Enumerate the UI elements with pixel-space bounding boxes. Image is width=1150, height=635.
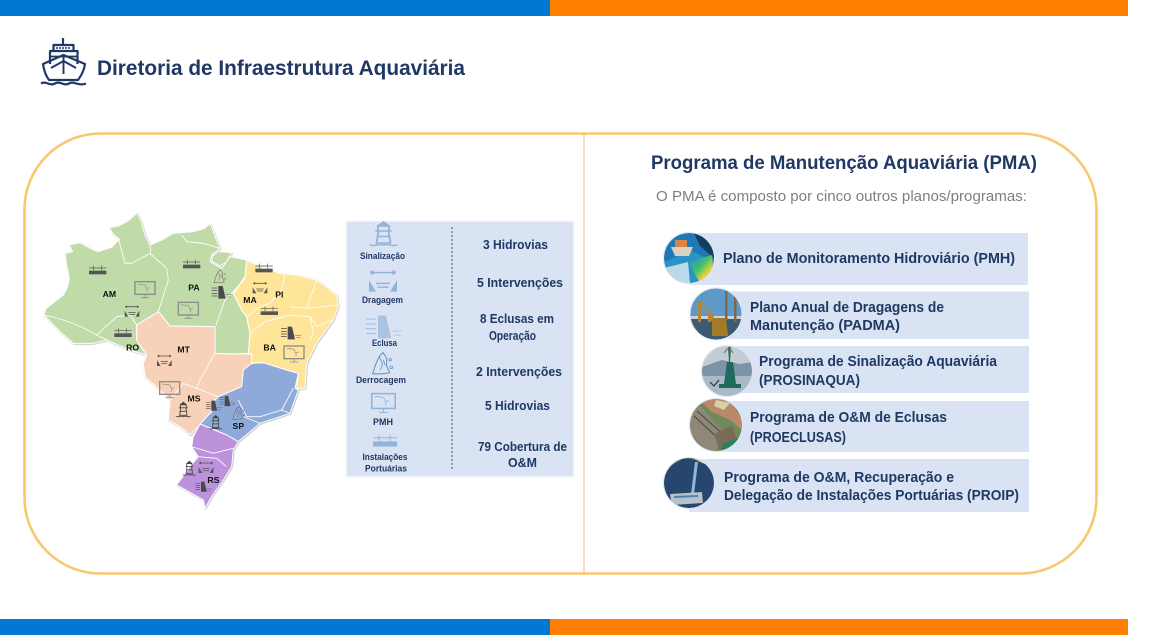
map icons [89,260,304,492]
label: Sinalização: Sinalização [360,251,405,261]
panel divider [583,134,585,573]
Marajó island [212,252,232,266]
program: PROSINAQUA [702,346,1029,396]
state labels: MS [188,394,201,404]
icons: monitors [135,282,304,398]
top colour bar [0,0,1128,16]
value: 2 Intervenções: 2 Intervenções [476,365,562,379]
label: Eclusa: Eclusa [372,338,398,348]
state labels: MA [243,295,257,305]
label: Derrocagem: Derrocagem [356,375,406,385]
value: 79 Cobertura de O&M: 79 Cobertura de [478,440,567,454]
program: PMH [664,232,1028,285]
value: 8 Eclusas em Operação: Operação [489,329,536,343]
photo: dredger [690,288,742,340]
panel: legend table [346,221,574,476]
icons: rock removal [214,270,245,419]
state labels: BA [263,343,277,353]
region: Norte [44,213,250,355]
icon: rock removal [373,353,393,374]
state labels: MT [177,345,191,355]
icons: lighthouses [176,402,222,475]
label: Instalações Portuárias: Portuárias [365,464,407,474]
bottom colour bar [0,619,1128,635]
value: 8 Eclusas em Operação: 8 Eclusas em [480,312,554,326]
photo: lock aerial [690,399,742,451]
value: 5 Hidrovias: 5 Hidrovias [485,399,550,413]
program: PROECLUSAS [690,398,1029,452]
region: Sudeste [200,363,298,442]
text: Programa de O&M, Recuperação e [724,469,954,486]
icons: dredging [125,282,267,473]
text: (PROSINAQUA) [759,372,860,389]
icon: port [373,434,397,446]
photo: port pier [664,458,714,508]
value: 79 Cobertura de O&M: O&M [508,456,537,470]
label: Instalações Portuárias: Instalações [362,452,408,462]
state labels: RS [207,475,220,485]
panel: main rounded frame [24,134,1096,574]
icon: dredging [369,271,397,292]
icon: monitor [372,394,395,412]
region: Nordeste [233,260,338,388]
value: 3 Hidrovias: 3 Hidrovias [483,238,548,252]
region: Centro-Oeste [137,312,252,435]
icon: ship [41,38,86,84]
map regions [44,213,338,508]
state labels: SP [233,421,244,431]
label: PMH: PMH [373,417,393,427]
heading: PMA: Programa de Manutenção Aquaviária (PMA) [651,152,1037,174]
icons: ports [89,260,278,337]
state labels: RO [126,343,139,353]
state borders [44,235,338,467]
state labels: PI [275,290,283,300]
title: Diretoria de Infraestrutura Aquaviária [97,57,465,80]
state labels [103,282,283,485]
subheading: O PMA é composto por cinco outros planos/programas: [656,189,1027,205]
text: Manutenção (PADMA) [750,317,900,334]
text: Programa de O&M de Eclusas [750,409,947,426]
icon: lock [366,316,402,338]
text: Plano Anual de Dragagens de [750,299,944,316]
photo: buoy [702,346,752,396]
program: PADMA [690,288,1029,340]
photo: survey vessel [664,233,714,283]
text: Programa de Sinalização Aquaviária [759,353,998,370]
map of Brazil [44,213,338,508]
region: Sul [177,424,238,508]
icon: lighthouse [370,221,397,246]
label: Dragagem: Dragagem [362,295,403,305]
program: PROIP [664,458,1029,512]
state labels: AM [103,289,116,299]
value: 5 Intervenções: 5 Intervenções [477,276,563,290]
state labels: PA [188,282,200,292]
text: Delegação de Instalações Portuárias (PROIP) [724,487,1019,504]
text: (PROECLUSAS) [750,429,846,446]
text: Plano de Monitoramento Hidroviário (PMH) [723,250,1015,267]
icons: locks [196,286,301,492]
